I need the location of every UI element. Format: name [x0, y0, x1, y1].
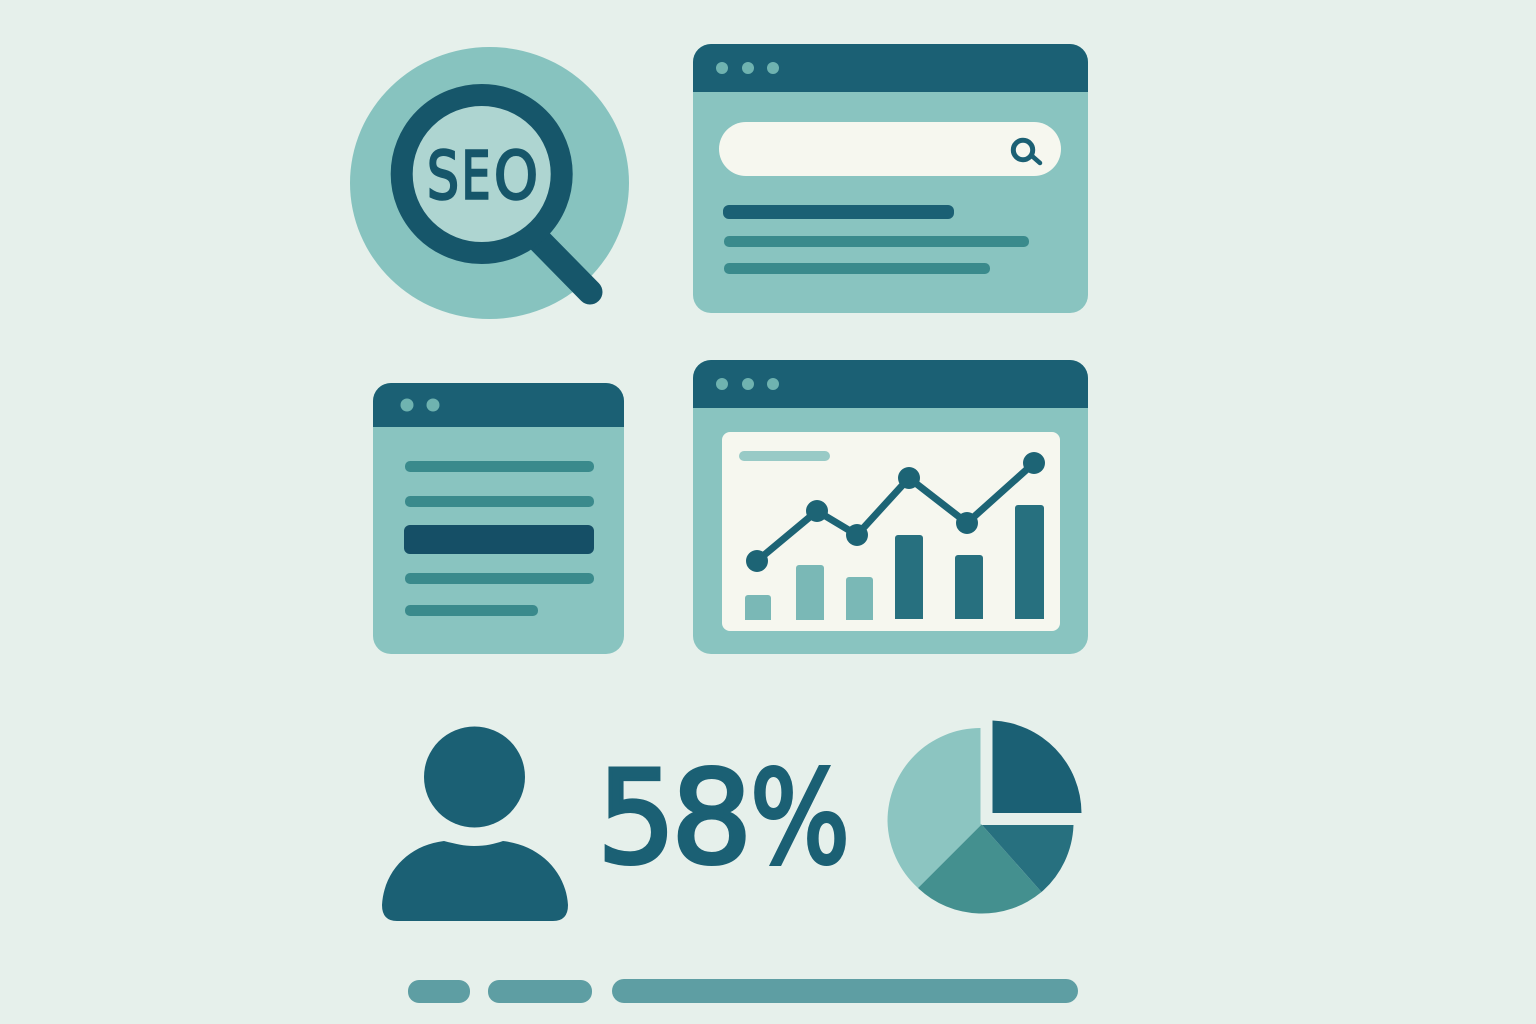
- chart card: [722, 432, 1060, 631]
- search bar: [719, 122, 1061, 176]
- panel: content list window: [373, 383, 624, 654]
- SEO label: S: [427, 138, 459, 214]
- footer pills: [408, 979, 1078, 1003]
- pie chart: [888, 720, 1082, 914]
- bar chart: [745, 505, 1044, 620]
- SEO label: [427, 138, 538, 214]
- statistic: 58%: 8: [671, 744, 752, 893]
- statistic: 58%: 5: [597, 744, 676, 893]
- panel: analytics browser window: [693, 360, 1088, 654]
- panel: search browser window: [693, 44, 1088, 313]
- list lines: [404, 461, 594, 616]
- SEO label: O: [494, 138, 538, 214]
- statistic: 58%: [597, 744, 850, 893]
- SEO label: E: [462, 138, 490, 214]
- icon: SEO magnifying glass: [350, 47, 629, 319]
- line chart: [746, 452, 1045, 572]
- statistic: 58%: %: [750, 744, 850, 893]
- search result lines: [723, 205, 1029, 274]
- icon: user: [382, 726, 568, 921]
